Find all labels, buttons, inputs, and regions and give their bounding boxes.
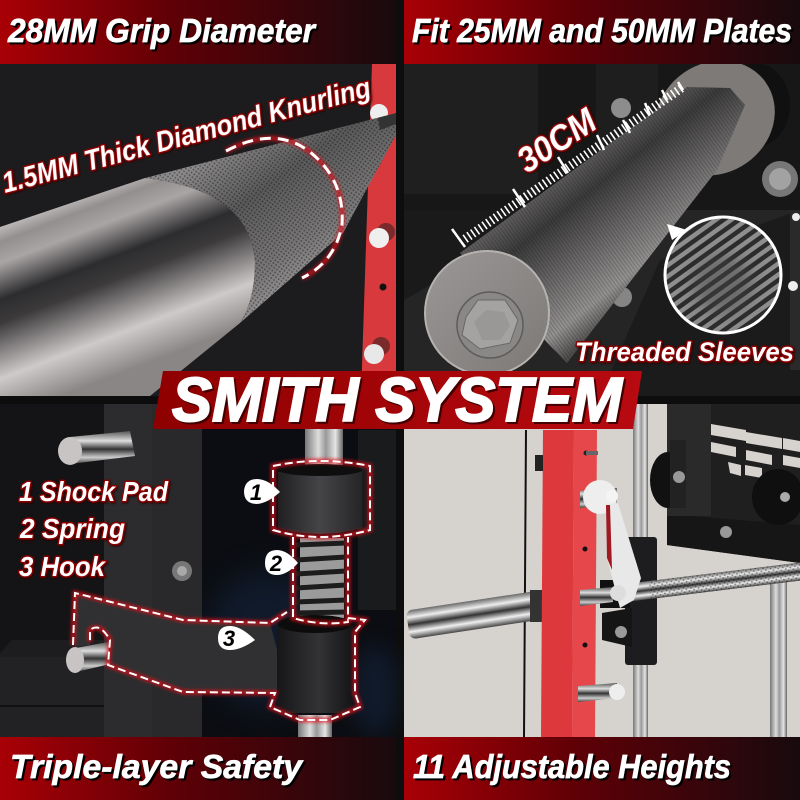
knurling label: 1.5MM Thick Diamond Knurling xyxy=(0,72,374,200)
header: plates xyxy=(404,0,800,64)
red column xyxy=(535,430,598,737)
dashed outline: shock pad xyxy=(273,461,370,537)
far collar xyxy=(658,64,775,176)
thread detail inset xyxy=(665,215,781,335)
safety pegs xyxy=(578,488,625,702)
silver hook xyxy=(583,480,641,608)
lower peg xyxy=(66,642,110,673)
callout 1: 1 xyxy=(250,480,262,505)
header: grip diameter: 28MM Grip Diameter xyxy=(7,12,317,49)
diamond knurled section xyxy=(145,113,396,323)
rack side plate xyxy=(788,210,800,370)
smooth steel bar xyxy=(0,178,255,396)
callout 3: 3 xyxy=(223,626,235,651)
spring xyxy=(296,538,346,618)
component list: 2 Spring xyxy=(19,513,125,544)
panel: plate sleeves xyxy=(404,37,800,396)
sleeve end cap xyxy=(425,251,549,375)
knurled bar xyxy=(616,562,800,603)
callout 2 xyxy=(265,550,298,576)
dark background xyxy=(404,64,800,396)
housing logo cutout xyxy=(711,424,800,478)
dashed outline: spring xyxy=(293,537,348,623)
red upright column xyxy=(361,64,396,396)
left bar end xyxy=(406,590,544,639)
footer: heights xyxy=(404,737,800,800)
machine background xyxy=(0,404,400,737)
wall background xyxy=(404,404,800,737)
black upright beam xyxy=(104,404,202,737)
guide rod xyxy=(298,428,343,737)
callout 2: 2 xyxy=(269,551,283,576)
pulley housing xyxy=(667,404,800,563)
footer: safety xyxy=(0,737,396,800)
panel: grip diameter xyxy=(0,64,396,396)
header: grip diameter xyxy=(0,0,396,64)
component list: 3 Hook xyxy=(19,551,106,582)
guide rods xyxy=(633,404,787,737)
hook cylinder xyxy=(277,615,353,713)
dashed highlight ring xyxy=(226,138,342,278)
hook plate xyxy=(75,593,285,693)
threaded sleeve xyxy=(460,87,745,363)
callout 3 xyxy=(218,626,255,651)
panel: adjustable heights xyxy=(404,404,800,737)
background bolts xyxy=(611,98,798,307)
callout 1 xyxy=(244,479,280,505)
shock pad xyxy=(278,464,362,534)
measurement ruler xyxy=(452,82,683,247)
threaded sleeves label: Threaded Sleeves xyxy=(575,337,794,367)
center banner: SMITH SYSTEM xyxy=(172,366,623,435)
footer: safety: Triple-layer Safety xyxy=(10,748,304,785)
carriage sleeve xyxy=(600,537,657,665)
pulley wheels xyxy=(650,452,800,538)
component list xyxy=(19,476,169,582)
footer: heights: 11 Adjustable Heights xyxy=(413,748,731,785)
upper peg xyxy=(58,431,135,465)
panel background xyxy=(0,64,396,396)
30CM label: 30CM xyxy=(510,101,604,181)
component list: 1 Shock Pad xyxy=(19,476,169,507)
cable xyxy=(524,430,526,737)
panel: triple-layer safety xyxy=(0,404,400,737)
dashed outline: hook xyxy=(73,593,365,720)
